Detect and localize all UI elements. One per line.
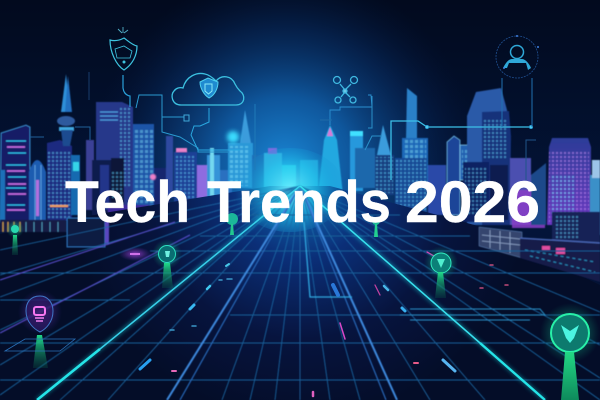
pin: green bulb [152, 239, 182, 288]
pin: green shield [424, 246, 458, 298]
low buildings foreground [0, 212, 600, 282]
pin: distant right [372, 217, 380, 237]
pin: magenta robot [5, 290, 75, 368]
icon: shield [110, 27, 137, 70]
ground plane [0, 148, 600, 400]
title: 2026 [405, 170, 540, 235]
city skyline: right [395, 88, 600, 235]
bright cyan rails [37, 186, 545, 400]
title: Tech [65, 170, 190, 235]
pin: distant left [226, 213, 238, 235]
pin: small left [6, 220, 24, 255]
circuit lines [30, 72, 536, 180]
pin: large green [540, 303, 600, 400]
city skyline: centre glow [227, 110, 394, 195]
icon: cloud with shield [172, 74, 244, 105]
title: Trends [207, 170, 391, 235]
icon: person [496, 35, 539, 78]
road dashes [140, 252, 508, 396]
city skyline: left [0, 74, 232, 229]
road light lines [0, 186, 600, 400]
title [65, 170, 540, 235]
purple glow patch [119, 247, 151, 261]
icon: drone [334, 76, 358, 103]
